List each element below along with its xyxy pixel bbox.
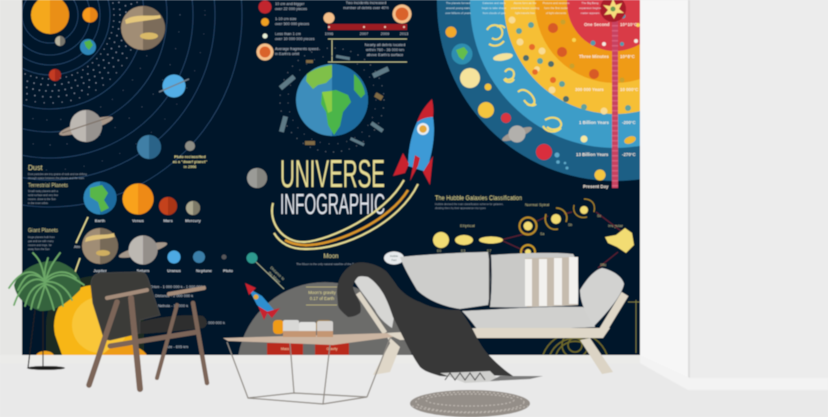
striped pillow — [525, 257, 578, 307]
ring labels: 10^10°C — [620, 22, 638, 27]
ring labels: 1 Billion Years — [579, 120, 609, 125]
ring descriptions: expansion begins — [579, 6, 601, 10]
pouf — [410, 390, 530, 417]
hubble classification: dividing them by their appearance into types — [435, 206, 486, 210]
left armrest and frame — [353, 272, 397, 328]
debris timeline: 2009 — [381, 32, 389, 36]
hubble classification: SBc — [600, 263, 607, 267]
hubble classification: E0 — [437, 249, 441, 253]
hidden lower-right galaxy — [543, 332, 607, 358]
earth — [80, 39, 96, 55]
ring labels: -200°C — [622, 120, 637, 125]
distance text — [150, 285, 225, 349]
moon section: The Moon is the only natural satellite of the Earth planet — [296, 262, 368, 266]
ring labels — [575, 22, 639, 189]
terrestrial planets row — [84, 182, 202, 223]
text: dust and planets: Dust particles are tiny grains of rock and ice drifting — [28, 172, 87, 176]
debris legend — [256, 0, 318, 60]
title: infographic: INFOGRAPHIC — [280, 189, 385, 221]
text: dust and planets: away from the Sun — [28, 247, 50, 251]
text: dust and planets: Terrestrial Planets — [28, 183, 69, 189]
text: dust and planets: through space between the planets and the stars — [28, 176, 85, 180]
ring descriptions: Protons and neutrons — [543, 1, 570, 5]
armchair — [89, 272, 207, 389]
debris legend: 1-10 cm size — [275, 17, 297, 21]
text: dust and planets: Huge planets built from — [28, 235, 55, 239]
ring labels: 10 000°C — [620, 87, 639, 92]
distance text: Orion - 1 000 000 k - 1 000 000 k — [150, 285, 206, 289]
ring descriptions: begin to take shape — [482, 6, 507, 10]
mercury orbit planet — [55, 36, 65, 46]
debris timeline — [324, 1, 412, 62]
galaxies in blue ring — [487, 25, 561, 132]
moon section — [238, 254, 412, 355]
hubble classification: Normal Spiral — [525, 202, 549, 207]
ring descriptions: Atoms form as the — [514, 1, 537, 5]
speech bubble: Fact — [391, 258, 397, 262]
rocket with swoosh — [272, 99, 434, 249]
sofa — [353, 252, 625, 375]
pluto — [185, 141, 195, 151]
distance text: Distance - 2 000 000 k — [155, 294, 193, 298]
ring descriptions: light travels free — [515, 11, 535, 15]
hubble classification: Sa — [540, 232, 544, 236]
moon section: the Moon — [267, 271, 281, 284]
text: dust and planets: moons and rings, far — [28, 243, 52, 247]
hubble classification: Elliptical — [460, 223, 475, 228]
text: dust and planets: Dust — [28, 165, 42, 172]
pluto note: as a "dwarf planet" — [173, 160, 207, 164]
ring descriptions — [445, 1, 601, 15]
ring descriptions: from clouds of gas — [483, 11, 506, 15]
venus — [82, 8, 98, 22]
distance text: Nebula - 10 000 k — [158, 304, 188, 308]
ring descriptions: matter appears — [581, 11, 600, 15]
big sun — [36, 276, 147, 355]
irregular galaxy — [605, 228, 634, 253]
text: dust and planets: moons, close to the Sun — [28, 197, 56, 201]
text: dust and planets: solid surface and very few — [28, 193, 58, 197]
temperature bar — [612, 0, 618, 188]
debris timeline: Two incidents increased — [346, 1, 386, 5]
terrestrial planets row: Mars — [163, 218, 173, 223]
uranus — [159, 74, 189, 98]
present-day objects — [446, 26, 606, 180]
ring descriptions: around young stars — [446, 6, 471, 10]
small rocket — [245, 283, 280, 320]
giant planets row: Atm — [74, 245, 80, 249]
text: dust and planets: Small rocky planets with a — [28, 189, 59, 193]
ring labels: 10^8°C — [620, 54, 636, 59]
debris timeline: within 760 - 36 000 km — [366, 48, 404, 52]
giant planets row: Pluto — [223, 268, 234, 273]
jupiter — [121, 6, 165, 50]
cups — [283, 320, 333, 337]
ring labels: 13 Billion Years — [576, 152, 609, 157]
giant planets row — [74, 217, 284, 289]
hubble classification — [433, 195, 634, 268]
universe timeline rings — [436, 0, 641, 190]
speech bubble — [384, 252, 404, 264]
blanket — [337, 262, 543, 383]
moon section: Moon's gravity — [308, 290, 337, 295]
orbits — [0, 0, 242, 207]
debris timeline: 2007 — [360, 32, 368, 36]
right galaxy bar — [628, 300, 640, 353]
pluto note — [173, 155, 207, 169]
ring descriptions: The Big Bang — [582, 1, 599, 5]
ring labels: Present Day — [583, 184, 609, 189]
giant planets row: Saturn — [137, 268, 150, 273]
hubble classification: Hubble devised the main classification scheme for galaxies, — [435, 202, 504, 206]
ring descriptions: over billions of years — [445, 11, 471, 15]
distance text: 1 000 000 k — [205, 321, 225, 325]
ring descriptions: The planets formed — [446, 1, 470, 5]
debris timeline: above Earth's surface — [367, 53, 403, 57]
ring descriptions: universe keeps cooling — [511, 6, 540, 10]
debris legend: Less than 1 cm — [275, 32, 301, 36]
hubble classification: E7 — [487, 249, 491, 253]
hubble classification: The Hubble Galaxies Classification — [435, 195, 522, 202]
debris timeline: 1996 — [325, 32, 333, 36]
big bang star — [600, 0, 626, 22]
moon section: 0.17 of Earth — [310, 296, 335, 301]
debris timeline: 2013 — [400, 32, 408, 36]
debris timeline: number of debris over 40% — [343, 6, 389, 10]
pluto note: in 2006 — [184, 165, 196, 169]
hubble classification: Sb — [568, 223, 572, 227]
gray moon small — [247, 168, 267, 188]
debris legend: over 22 000 pieces — [275, 7, 307, 11]
giant planets row: Jupiter — [93, 268, 107, 273]
debris legend: 10 cm and bigger — [275, 2, 305, 6]
text: dust and planets: in the inner orbits — [28, 201, 49, 205]
ring descriptions: Galaxies and stars — [482, 1, 506, 5]
ring labels: 300 000 Years — [575, 87, 604, 92]
debris legend: over 10 000 000 pieces — [275, 37, 315, 41]
pluto note: Pluto reclassified — [174, 155, 206, 159]
hubble classification: E3 — [461, 249, 465, 253]
ring labels: One Second — [584, 22, 610, 27]
mars — [49, 69, 61, 81]
elliptical galaxies — [433, 232, 503, 248]
earth with satellites — [279, 48, 389, 152]
speech bubble: Hubble — [390, 254, 399, 258]
title: universe: UNIVERSE — [280, 153, 385, 196]
mural panel — [21, 0, 641, 356]
distance text: Size - 695 km — [165, 345, 188, 349]
saturn — [58, 110, 114, 142]
spiral galaxies — [520, 199, 594, 259]
particles and atoms in yellow and orange rings — [508, 14, 640, 114]
hubble classification: Sc — [597, 214, 601, 218]
neptune — [137, 135, 161, 159]
terrestrial planets row: Venus — [132, 218, 145, 223]
debris legend: over 500 000 pieces — [275, 22, 309, 26]
debris legend: in Earth's orbit — [275, 52, 300, 56]
ring descriptions: form the first nuclei — [544, 6, 568, 10]
giant planets row: Neptune — [196, 268, 213, 273]
sun — [31, 0, 69, 34]
text: dust and planets: Giant Planets — [28, 228, 59, 234]
debris timeline: Nearly all debris located — [365, 43, 405, 47]
giant planets row: Uranus — [167, 268, 182, 273]
text: dust and planets — [28, 165, 87, 251]
debris legend: Average fragments speed — [275, 47, 318, 51]
text: dust and planets: gas and ice with many — [28, 239, 54, 243]
ring labels: -270°C — [622, 152, 637, 157]
ring labels: Three Minutes — [579, 54, 609, 59]
solar system diagram — [0, 0, 242, 207]
moon section: Gravity — [326, 347, 338, 351]
plant on stand — [9, 253, 84, 370]
moon section: Moon — [323, 254, 339, 260]
terrestrial planets row: Earth — [95, 218, 106, 223]
terrestrial planets row: Mercury — [185, 218, 202, 223]
ring descriptions: of light elements — [546, 11, 567, 15]
asteroid belt — [24, 1, 206, 171]
moon section: Mass — [281, 347, 289, 351]
hubble classification: Irregular — [608, 223, 624, 228]
moon section: Distance to — [269, 266, 285, 281]
coffee table — [223, 320, 393, 404]
